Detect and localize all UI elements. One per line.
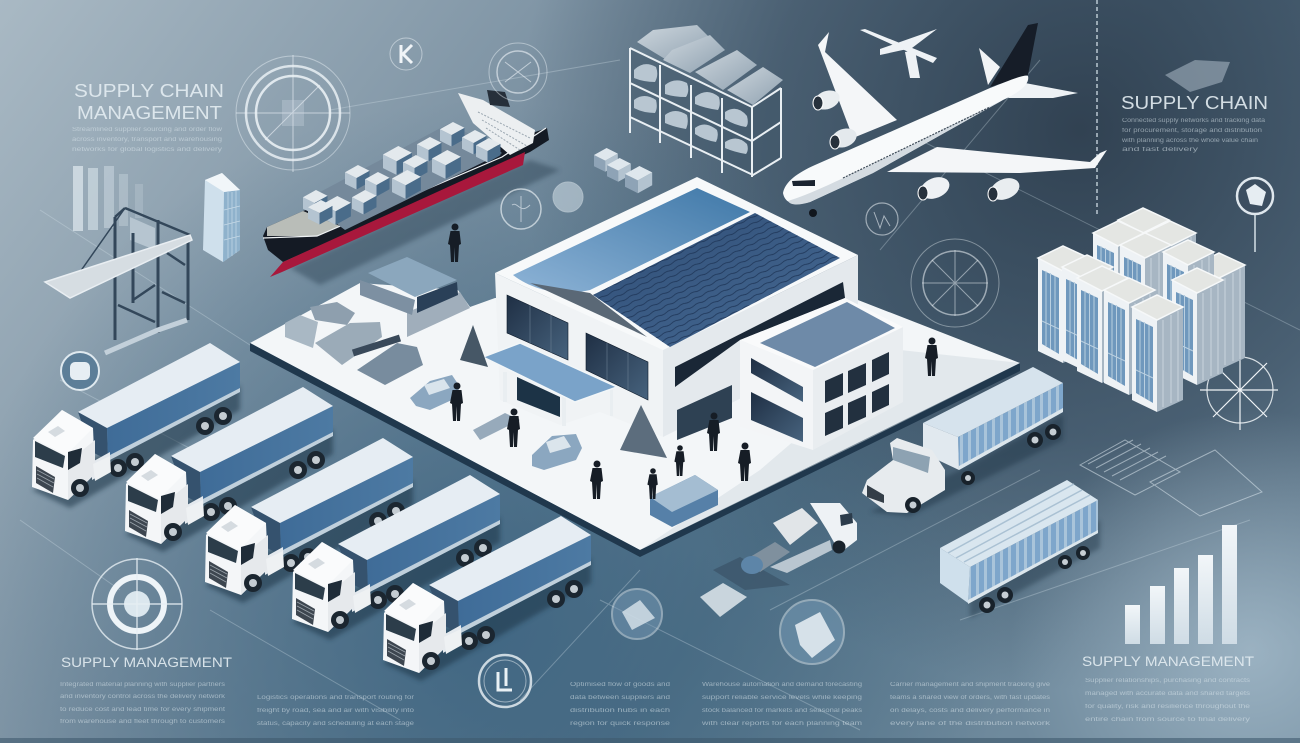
icon: badge bottom: [479, 655, 531, 707]
dark solar roof: [593, 213, 840, 347]
text block: bottom left: Integrated material planning with supplier partners: [60, 682, 225, 688]
annex left windows: [751, 358, 803, 442]
text block: bottom left: and inventory control across the delivery network: [60, 694, 226, 700]
text block: bottom 3: Optimised flow of goods and: [570, 682, 670, 688]
text block: bottom 3: distribution hubs in each: [570, 708, 670, 714]
icon: compass dial mid: [911, 239, 999, 327]
icon: person badge left: [61, 352, 99, 390]
heading: supply management left: SUPPLY MANAGEMENT: [61, 655, 232, 670]
title: supply chain management: [74, 80, 224, 123]
icon: map circle bottom 1: [612, 589, 662, 639]
cars: [410, 375, 582, 470]
rack roof humps: [637, 25, 783, 105]
server towers right: [1038, 208, 1245, 412]
left windows: [507, 295, 648, 400]
title: supply chain management: MANAGEMENT: [77, 102, 222, 123]
truck 1: [32, 343, 240, 508]
icon: globe fragment top right: [1165, 60, 1230, 92]
text block: bottom 2: Logistics operations and transport routing for: [257, 695, 414, 701]
cargo ship: [263, 90, 560, 285]
text block: bottom left: [60, 682, 226, 725]
text block: bottom 5: teams a shared view of orders, with fast updates: [890, 695, 1050, 701]
flatbed truck bottom center: [700, 503, 857, 617]
text block: bottom 5: Carrier management and shipment tracking give: [890, 682, 1051, 688]
text block: bottom 4: support reliable service levels while keeping: [702, 695, 862, 701]
icon: target dial top left: [236, 55, 350, 172]
grey roof valley: [530, 283, 647, 337]
text block: top left: networks for global logistics and delivery: [72, 147, 222, 153]
crate stack: [650, 475, 718, 527]
loading yard goods: [285, 257, 470, 385]
text block: top right: for procurement, storage and distribution: [1122, 128, 1262, 134]
text block: bottom 2: [257, 695, 415, 727]
icon: compass right: [1200, 352, 1278, 430]
truck 3: [205, 438, 413, 603]
text block: bottom right: entire chain from source to final delivery: [1085, 717, 1250, 723]
text block: top right: with planning across the whole value chain: [1121, 138, 1258, 144]
yard blocks: [285, 302, 423, 385]
box truck right: [862, 367, 1063, 516]
text block: bottom 5: on delays, costs and delivery performance in: [890, 708, 1050, 714]
ship containers: [303, 122, 502, 230]
annex left wall: [740, 340, 813, 450]
airplane: [783, 23, 1107, 217]
text block: bottom right: managed with accurate data and shared targets: [1085, 691, 1250, 697]
ground floor glazing: [677, 385, 732, 440]
small plane: [860, 29, 937, 78]
icon: badge near plane: [866, 203, 898, 235]
text block: bottom 3: [570, 682, 671, 727]
text block: bottom 3: region for quick response: [570, 721, 671, 727]
main right wall: [663, 255, 858, 437]
text block: bottom 4: with clear reports for each planning team: [701, 721, 862, 727]
text block: top left: [72, 127, 223, 153]
text block: bottom 3: data between suppliers and: [570, 695, 670, 701]
ship superstructure: [458, 90, 535, 155]
text block: bottom 5: every lane of the distribution network: [890, 721, 1052, 727]
truck fleet: [32, 343, 591, 681]
main left wall: [495, 273, 663, 437]
text block: top left: across inventory, transport and warehousing: [72, 137, 222, 143]
text block: top right: [1121, 118, 1266, 153]
icon: map circle bottom 2: [780, 600, 844, 664]
heading: supply management right: SUPPLY MANAGEMENT: [1082, 654, 1254, 669]
main roof: [495, 177, 858, 350]
text block: bottom 2: status, capacity and scheduling at each stage: [257, 721, 415, 727]
text block: bottom 4: stock balanced for markets and seasonal peaks: [702, 708, 862, 714]
icon: target bottom left: [92, 558, 182, 650]
icon: tower building left: [203, 173, 240, 262]
title: supply chain management: SUPPLY CHAIN: [74, 80, 224, 101]
heading: supply chain right: SUPPLY CHAIN: [1121, 93, 1268, 113]
bar chart: bottom right: [1125, 525, 1237, 644]
site platform: [250, 283, 1020, 557]
text block: bottom right: [1085, 678, 1251, 723]
text block: bottom left: to reduce cost and lead time for every shipment: [60, 707, 225, 713]
text block: top left: Streamlined supplier sourcing and order flow: [72, 127, 223, 133]
icon: globe sphere: [553, 182, 583, 212]
text block: bottom 4: [701, 682, 862, 727]
icon: dial top: [489, 43, 547, 101]
crane: [45, 208, 192, 353]
text block: bottom right: Supplier relationships, purchasing and contracts: [1085, 678, 1250, 684]
bar chart: top left: [73, 166, 143, 231]
right dark window band: [675, 282, 845, 387]
warehouse rack: [630, 25, 783, 177]
icon: badge top k: [390, 38, 422, 70]
warehouse building: [483, 177, 903, 450]
icon: pin badge right: [1237, 178, 1273, 252]
people: [448, 224, 938, 499]
text block: bottom left: from warehouse and fleet through to customers: [60, 719, 225, 725]
trees: [460, 325, 667, 458]
text block: top right: and fast delivery: [1122, 147, 1198, 153]
text block: bottom 5: [890, 682, 1052, 727]
text block: bottom right: for quality, risk and resilience throughout the: [1085, 704, 1251, 710]
icon: circle badge near ship: [501, 189, 541, 229]
container trailer: [940, 480, 1100, 618]
truck 2: [125, 387, 333, 552]
text block: top right: Connected supply networks and tracking data: [1122, 118, 1266, 124]
small crates: [594, 148, 652, 193]
truck 5: [383, 516, 591, 681]
annex right wall: [813, 327, 903, 450]
truck 4: [292, 475, 500, 640]
text block: bottom 2: freight by road, sea and air with visibility into: [257, 708, 415, 714]
blue roof panel: [513, 188, 750, 293]
annex roof: [740, 298, 903, 370]
grate panels right: [1080, 440, 1262, 516]
canopy: [483, 343, 617, 426]
annex roof panel: [760, 302, 895, 367]
annex right windows: [825, 352, 889, 436]
text block: bottom 4: Warehouse automation and demand forecasting: [702, 682, 862, 688]
